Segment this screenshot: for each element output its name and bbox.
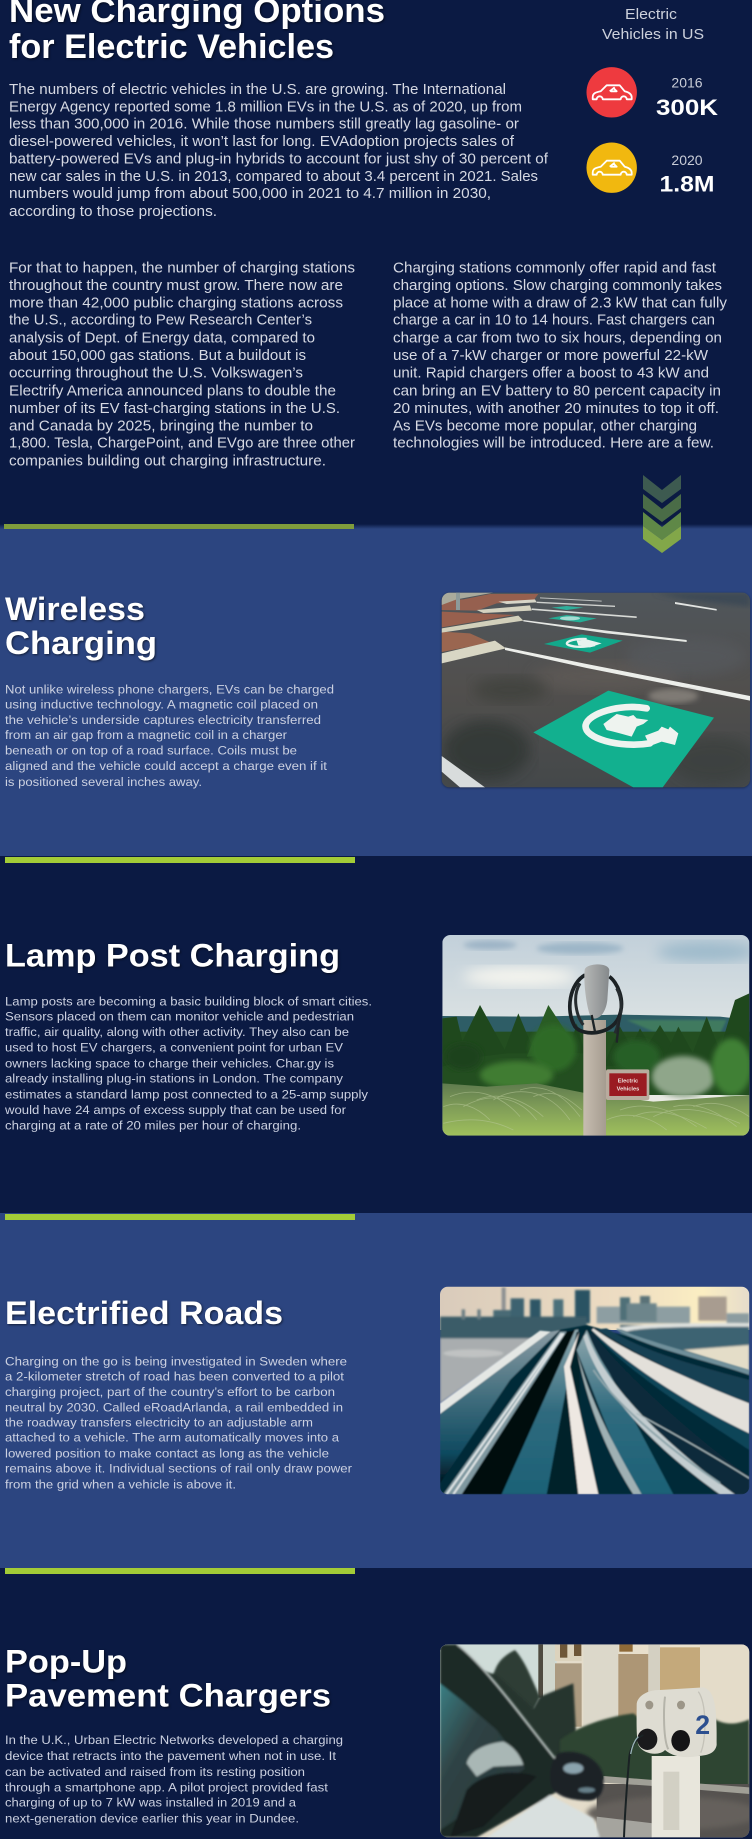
text column: charging stations growth: throughout the country must grow. There now are <box>9 278 343 294</box>
photo: motion-blurred road toward city skyline <box>440 1287 749 1494</box>
body: electrified roads: charging project, part of the country’s effort to be carbon <box>5 1385 335 1399</box>
body: pop-up pavement chargers: next-generation device earlier this year in Dundee. <box>5 1812 299 1826</box>
body: pop-up pavement chargers: In the U.K., Urban Electric Networks developed a charging <box>5 1733 343 1747</box>
body: pop-up pavement chargers: through a smartphone app. A pilot project provided fast <box>5 1780 329 1794</box>
body: lamp post charging: would have 24 amps of excess supply that can be used for <box>4 1103 346 1117</box>
body: electrified roads <box>5 1354 352 1492</box>
photo: charger on post in green landscape <box>442 935 752 1136</box>
heading: electrified roads: Electrified Roads <box>5 1295 283 1331</box>
heading: pop-up pavement chargers <box>5 1644 331 1714</box>
text column: rapid and fast charging: 20 minutes, with another 20 minutes to top it off. <box>393 401 719 417</box>
text column: charging stations growth: about 150,000 gas stations. But a buildout is <box>9 348 306 364</box>
text column: rapid and fast charging: place at home with a draw of 2.3 kW that can fully <box>393 295 728 311</box>
photo: white pop-up charger beside a car: 2 <box>695 1710 710 1740</box>
text column: charging stations growth: 1,800. Tesla, ChargePoint, and EVgo are three other <box>9 436 355 452</box>
text column: rapid and fast charging: can bring an EV battery to 80 percent capacity in <box>393 384 721 400</box>
stats heading: Electric <box>625 6 678 23</box>
intro paragraph: numbers would jump from about 500,000 in 2021 to 4.7 million in 2030, <box>9 186 491 202</box>
intro paragraph: battery-powered EVs and plug-in hybrids to account for just shy of 30 percent of <box>9 152 549 168</box>
title: for Electric Vehicles <box>9 28 334 66</box>
body: lamp post charging: Lamp posts are becoming a basic building block of smart cities. <box>5 994 372 1008</box>
body: wireless charging: Not unlike wireless phone chargers, EVs can be charged <box>5 683 334 697</box>
body: wireless charging: is positioned several inches away. <box>5 775 202 789</box>
icon: red car circle <box>586 67 637 118</box>
text column: charging stations growth: Electrify America announced plans to double the <box>9 384 336 400</box>
intro paragraph: new car sales in the U.S. in 2013, compared to about 3.4 percent in 2021. Sales <box>9 169 538 185</box>
body: electrified roads: lowered position to make contact as long as the vehicle <box>5 1446 329 1460</box>
body: wireless charging: beneath or on top of a road surface. Coils must be <box>5 744 297 758</box>
intro paragraph: Energy Agency reported some 1.8 million EVs in the U.S. as of 2020, up from <box>9 99 522 115</box>
stat 2016: 2016 <box>671 74 703 90</box>
text column: charging stations growth: and Canada by 2025, bringing the number to <box>9 418 313 434</box>
photo: parking bays with EV charging markings <box>442 593 752 787</box>
text column: rapid and fast charging: charge a car in 10 to 14 hours. Fast chargers can <box>393 313 715 329</box>
body: lamp post charging: estimates a standard lamp post connected to a 25-amp supply <box>5 1088 369 1102</box>
body: lamp post charging: charging at a rate of 20 miles per hour of charging. <box>5 1118 301 1132</box>
heading: pop-up pavement chargers: Pop-Up <box>5 1644 127 1680</box>
text column: charging stations growth: the U.S., according to Pew Research Center’s <box>9 313 312 329</box>
intro paragraph: diesel-powered vehicles, it won’t last for long. EVAdoption projects sales of <box>9 134 515 150</box>
photo: charger on post in green landscape: Vehicles <box>617 1087 639 1093</box>
body: pop-up pavement chargers: can be activated and raised from its resting position <box>5 1765 305 1779</box>
stat 2020: 1.8M <box>660 172 714 197</box>
photo: charger on post in green landscape: Electric <box>618 1079 638 1085</box>
text column: rapid and fast charging <box>393 261 728 452</box>
stat 2016: 300K <box>656 95 718 120</box>
body: pop-up pavement chargers: charging of up to 7 kW was installed in 2019 and a <box>5 1796 296 1810</box>
body: wireless charging: aligned and the vehicle could accept a charge even if it <box>5 759 328 773</box>
section bands <box>0 524 752 1839</box>
photo: white pop-up charger beside a car <box>440 1644 752 1837</box>
body: lamp post charging: traffic, air quality, along with other activity. They also can be <box>5 1025 349 1039</box>
text column: rapid and fast charging: charge a car from two to six hours, depending on <box>393 330 722 346</box>
text column: rapid and fast charging: unit. Rapid chargers offer a boost to 43 kW and <box>393 366 709 382</box>
panel: pop-up pavement chargers <box>5 1644 752 1837</box>
title <box>9 0 385 66</box>
body: electrified roads: from the grid when a vehicle is above it. <box>5 1478 236 1492</box>
text column: charging stations growth: number of its EV fast-charging stations in the U.S. <box>9 401 340 417</box>
arrow: downward chevrons <box>643 475 681 553</box>
body: lamp post charging: already installing plug-in stations in London. The company <box>5 1072 344 1086</box>
heading: wireless charging <box>5 591 157 661</box>
body: lamp post charging: Sensors placed on them can monitor vehicle and pedestrian <box>5 1010 354 1024</box>
heading: wireless charging: Charging <box>5 625 157 661</box>
body: wireless charging: using inductive technology. A magnetic coil placed on <box>5 698 318 712</box>
body: electrified roads: attached to a vehicle. The arm automatically moves into a <box>5 1431 339 1445</box>
text column: rapid and fast charging: Charging stations commonly offer rapid and fast <box>393 261 716 277</box>
intro paragraph <box>9 82 549 220</box>
stats heading <box>602 6 704 43</box>
stats heading: Vehicles in US <box>602 26 704 43</box>
body: electrified roads: neutral by 2030. Called eRoadArlanda, a rail embedded in <box>5 1400 343 1414</box>
divider bars <box>4 524 355 1574</box>
body: wireless charging: the vehicle’s underside captures electricity transferred <box>5 713 321 727</box>
text column: rapid and fast charging: use of a 7-kW charger or more powerful 22-kW <box>393 348 708 364</box>
icon: yellow car circle <box>586 142 637 193</box>
heading: wireless charging: Wireless <box>5 591 145 627</box>
intro paragraph: The numbers of electric vehicles in the U.S. are growing. The International <box>9 82 506 98</box>
body: lamp post charging: owners lacking space to charge their vehicles. Char.gy is <box>5 1056 334 1070</box>
body: wireless charging: from an air gap from a magnetic coil in a charger <box>5 728 287 742</box>
stat 2020 <box>660 152 714 197</box>
body: pop-up pavement chargers <box>5 1733 343 1826</box>
intro paragraph: according to those projections. <box>9 204 217 220</box>
body: lamp post charging: used to host EV chargers, a convenient point for urban EV <box>5 1040 344 1054</box>
body: lamp post charging <box>4 994 372 1132</box>
text column: charging stations growth: analysis of Dept. of Energy data, compared to <box>9 330 315 346</box>
text column: charging stations growth: more than 42,000 public charging stations across <box>9 295 343 311</box>
body: wireless charging <box>5 683 334 789</box>
heading: lamp post charging: Lamp Post Charging <box>5 938 340 974</box>
text column: charging stations growth: companies building out charging infrastructure. <box>9 453 326 469</box>
heading: pop-up pavement chargers: Pavement Chargers <box>5 1678 331 1714</box>
stat 2020: 2020 <box>671 152 703 168</box>
panel: electric vehicles in US stats <box>586 6 718 197</box>
text column: rapid and fast charging: As EVs become more popular, other charging <box>393 418 697 434</box>
text column: charging stations growth: For that to happen, the number of charging stations <box>9 261 355 277</box>
text column: rapid and fast charging: technologies will be introduced. Here are a few. <box>393 436 714 452</box>
body: electrified roads: a 2-kilometer stretch of road has been converted to a pilot <box>5 1369 345 1383</box>
body: electrified roads: remains above it. Individual sections of rail only draw power <box>5 1462 352 1476</box>
stat 2016 <box>656 74 718 120</box>
body: pop-up pavement chargers: device that retracts into the pavement when not in use. It <box>5 1749 337 1763</box>
panel: lamp post charging <box>4 935 752 1136</box>
text column: charging stations growth <box>9 261 355 469</box>
body: electrified roads: the roadway transfers electricity to an adjustable arm <box>5 1416 313 1430</box>
panel: wireless charging <box>5 591 752 789</box>
intro paragraph: less than 300,000 in 2016. While those numbers still greatly lag gasoline- or <box>9 117 519 133</box>
text column: charging stations growth: occurring throughout the U.S. Volkswagen’s <box>9 366 303 382</box>
text column: rapid and fast charging: charging options. Slow charging commonly takes <box>393 278 722 294</box>
body: electrified roads: Charging on the go is being investigated in Sweden where <box>5 1354 347 1368</box>
panel: electrified roads <box>5 1287 749 1494</box>
